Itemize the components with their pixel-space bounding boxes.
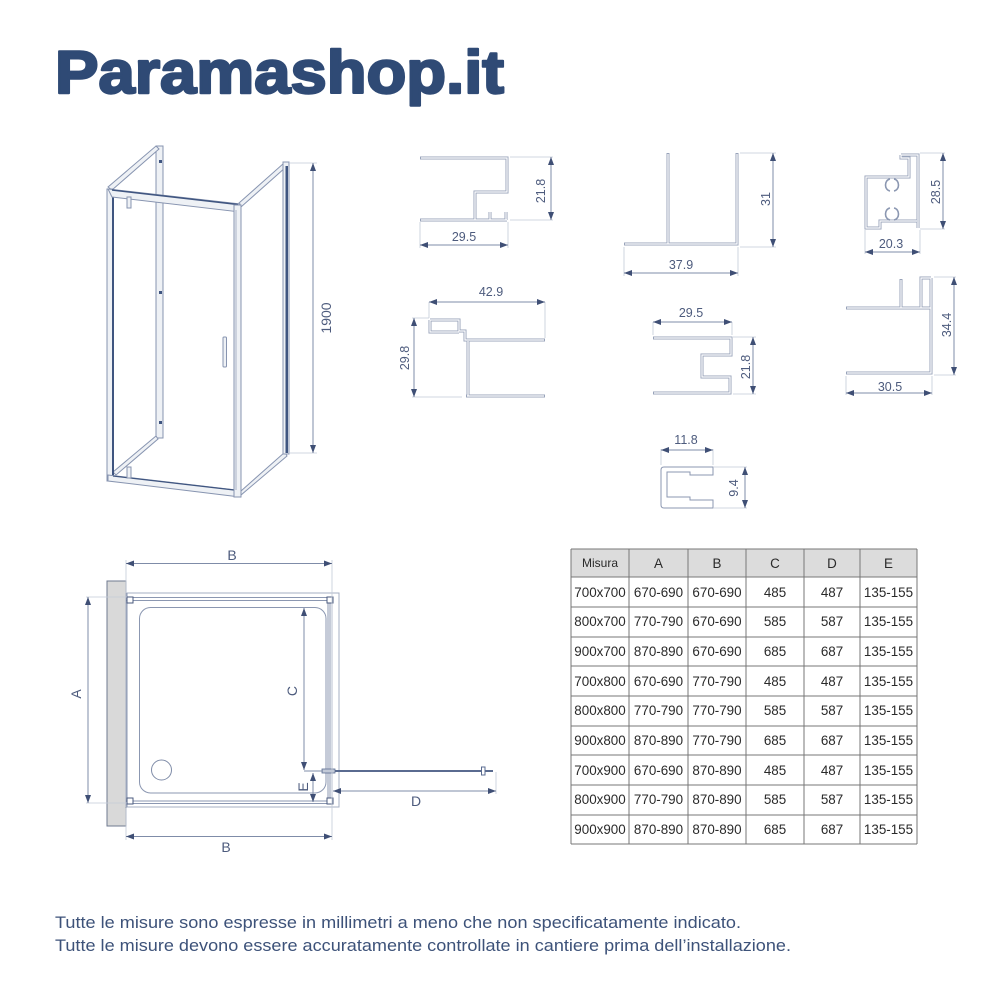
row 800x700	[574, 614, 913, 629]
row 900x700: 670-690	[692, 644, 742, 659]
outer enclosure	[126, 593, 339, 807]
dimension D: D	[411, 793, 421, 809]
profile 20.3 x 28.5	[865, 153, 945, 254]
row 700x800: 487	[821, 674, 843, 689]
drain	[152, 760, 172, 780]
row 700x700: 670-690	[692, 585, 742, 600]
row 900x800: 135-155	[864, 733, 913, 748]
row 800x700: 800x700	[574, 614, 626, 629]
shower enclosure perspective drawing	[107, 146, 334, 497]
door left post	[107, 189, 114, 481]
dimension B top	[126, 547, 332, 840]
door right post	[234, 205, 241, 497]
profile 11.8 x 9.4: 11.8	[674, 433, 698, 447]
profile 20.3 x 28.5: 20.3	[879, 237, 903, 251]
table header background	[571, 549, 917, 577]
wall	[107, 581, 126, 826]
dimension C: C	[284, 686, 300, 696]
row 700x800	[574, 674, 913, 689]
profile 30.5 x 34.4: 34.4	[940, 313, 954, 337]
row 800x700: 587	[821, 614, 843, 629]
dimension E: E	[295, 782, 311, 792]
row 700x900: 135-155	[864, 763, 913, 778]
row 800x800: 135-155	[864, 703, 913, 718]
profile 42.9 x 29.8	[398, 285, 545, 397]
row 800x800: 770-790	[692, 703, 742, 718]
row 800x800: 587	[821, 703, 843, 718]
profile 37.9 x 31: 31	[759, 192, 773, 206]
row 700x700: 485	[764, 585, 786, 600]
row 800x900: 870-890	[692, 792, 742, 807]
row 800x900: 800x900	[574, 792, 626, 807]
footer note	[55, 914, 791, 955]
row 900x900: 685	[764, 822, 786, 837]
row 700x800: 670-690	[634, 674, 683, 689]
row 800x800: 800x800	[574, 703, 626, 718]
table header: D	[827, 556, 837, 571]
row 900x700	[574, 644, 913, 659]
bottom left edge	[113, 436, 158, 475]
table header: Misura	[582, 556, 618, 570]
row 700x900: 485	[764, 763, 786, 778]
profile 29.5 x 21.8 open	[653, 306, 756, 394]
profile 29.5 x 21.8 open: 29.5	[679, 306, 703, 320]
right bottom edge	[241, 452, 287, 495]
row 700x700: 700x700	[574, 585, 626, 600]
hinge bottom	[127, 467, 131, 478]
row 900x900: 687	[821, 822, 843, 837]
profile 29.5 x 21.8	[420, 157, 553, 248]
open door	[322, 767, 493, 775]
row 900x900: 135-155	[864, 822, 913, 837]
row 900x700: 687	[821, 644, 843, 659]
top left edge	[108, 146, 159, 190]
right post	[283, 162, 289, 454]
door top beam	[108, 189, 240, 212]
dimension E	[295, 773, 313, 802]
dimension B top: B	[227, 547, 237, 563]
door bottom beam	[108, 475, 240, 497]
row 700x800: 135-155	[864, 674, 913, 689]
profile 30.5 x 34.4: 30.5	[878, 380, 902, 394]
table header: A	[654, 556, 663, 571]
row 800x700: 135-155	[864, 614, 913, 629]
height dimension: 1900	[318, 302, 334, 334]
row 900x900: 900x900	[574, 822, 626, 837]
row 800x800: 770-790	[634, 703, 683, 718]
footer note: Tutte le misure sono espresse in millimetri a meno che non specificatamente indicato.	[55, 914, 741, 932]
row 900x700: 870-890	[634, 644, 683, 659]
door handle	[223, 337, 226, 367]
row 900x900: 870-890	[692, 822, 742, 837]
row 800x900: 585	[764, 792, 786, 807]
row 900x800: 685	[764, 733, 786, 748]
row 900x800: 770-790	[692, 733, 742, 748]
profile 11.8 x 9.4	[661, 433, 747, 508]
row 900x800	[574, 733, 913, 748]
row 800x900: 587	[821, 792, 843, 807]
row 900x700: 135-155	[864, 644, 913, 659]
height dimension	[290, 163, 334, 453]
table header	[582, 556, 893, 571]
back post fixings	[159, 160, 162, 424]
row 700x900: 700x900	[574, 763, 626, 778]
row 700x800: 770-790	[692, 674, 742, 689]
row 700x900: 670-690	[634, 763, 683, 778]
row 900x700: 900x700	[574, 644, 626, 659]
table header: C	[770, 556, 780, 571]
row 900x800: 870-890	[634, 733, 683, 748]
profile 42.9 x 29.8: 42.9	[479, 285, 503, 299]
profile 37.9 x 31	[624, 153, 776, 276]
profile 29.5 x 21.8 open: 21.8	[739, 355, 753, 379]
corner brackets	[127, 597, 333, 804]
row 800x800: 585	[764, 703, 786, 718]
table header: E	[884, 556, 893, 571]
row 800x900	[574, 792, 913, 807]
row 700x800: 700x800	[574, 674, 626, 689]
right top edge	[239, 163, 286, 207]
row 800x800	[574, 703, 913, 718]
row 700x700: 487	[821, 585, 843, 600]
row 700x700: 135-155	[864, 585, 913, 600]
row 700x700: 670-690	[634, 585, 683, 600]
row 700x900: 487	[821, 763, 843, 778]
profile 29.5 x 21.8: 21.8	[534, 179, 548, 203]
plan view drawing	[68, 547, 496, 855]
row 700x900	[574, 763, 913, 778]
hinge top	[127, 197, 131, 208]
dimension A: A	[68, 689, 84, 699]
row 800x900: 135-155	[864, 792, 913, 807]
row 700x900: 870-890	[692, 763, 742, 778]
dimension A	[68, 597, 127, 803]
shower tray	[140, 608, 326, 793]
row 800x700: 585	[764, 614, 786, 629]
row 900x800: 900x800	[574, 733, 626, 748]
row 900x800: 687	[821, 733, 843, 748]
top and bottom panels	[126, 593, 332, 807]
table grid	[571, 549, 917, 844]
profile 29.5 x 21.8: 29.5	[452, 230, 476, 244]
row 900x700: 685	[764, 644, 786, 659]
profile 37.9 x 31: 37.9	[669, 258, 693, 272]
table header: B	[713, 556, 722, 571]
profile 11.8 x 9.4: 9.4	[727, 479, 741, 497]
row 900x900: 870-890	[634, 822, 683, 837]
row 800x900: 770-790	[634, 792, 683, 807]
profile 42.9 x 29.8: 29.8	[398, 346, 412, 370]
row 800x700: 770-790	[634, 614, 683, 629]
profile 30.5 x 34.4	[846, 277, 956, 395]
footer note: Tutte le misure devono essere accuratamente controllate in cantiere prima dell’installazione.	[55, 937, 791, 955]
back left post	[156, 146, 163, 438]
profile 20.3 x 28.5: 28.5	[929, 180, 943, 204]
row 800x700: 670-690	[692, 614, 742, 629]
right panel	[328, 598, 332, 803]
row 700x800: 485	[764, 674, 786, 689]
size table	[571, 549, 917, 844]
title: Paramashop.it	[55, 39, 504, 106]
row 900x900	[574, 822, 913, 837]
row 700x700	[574, 585, 913, 600]
dimension B bottom: B	[221, 839, 231, 855]
